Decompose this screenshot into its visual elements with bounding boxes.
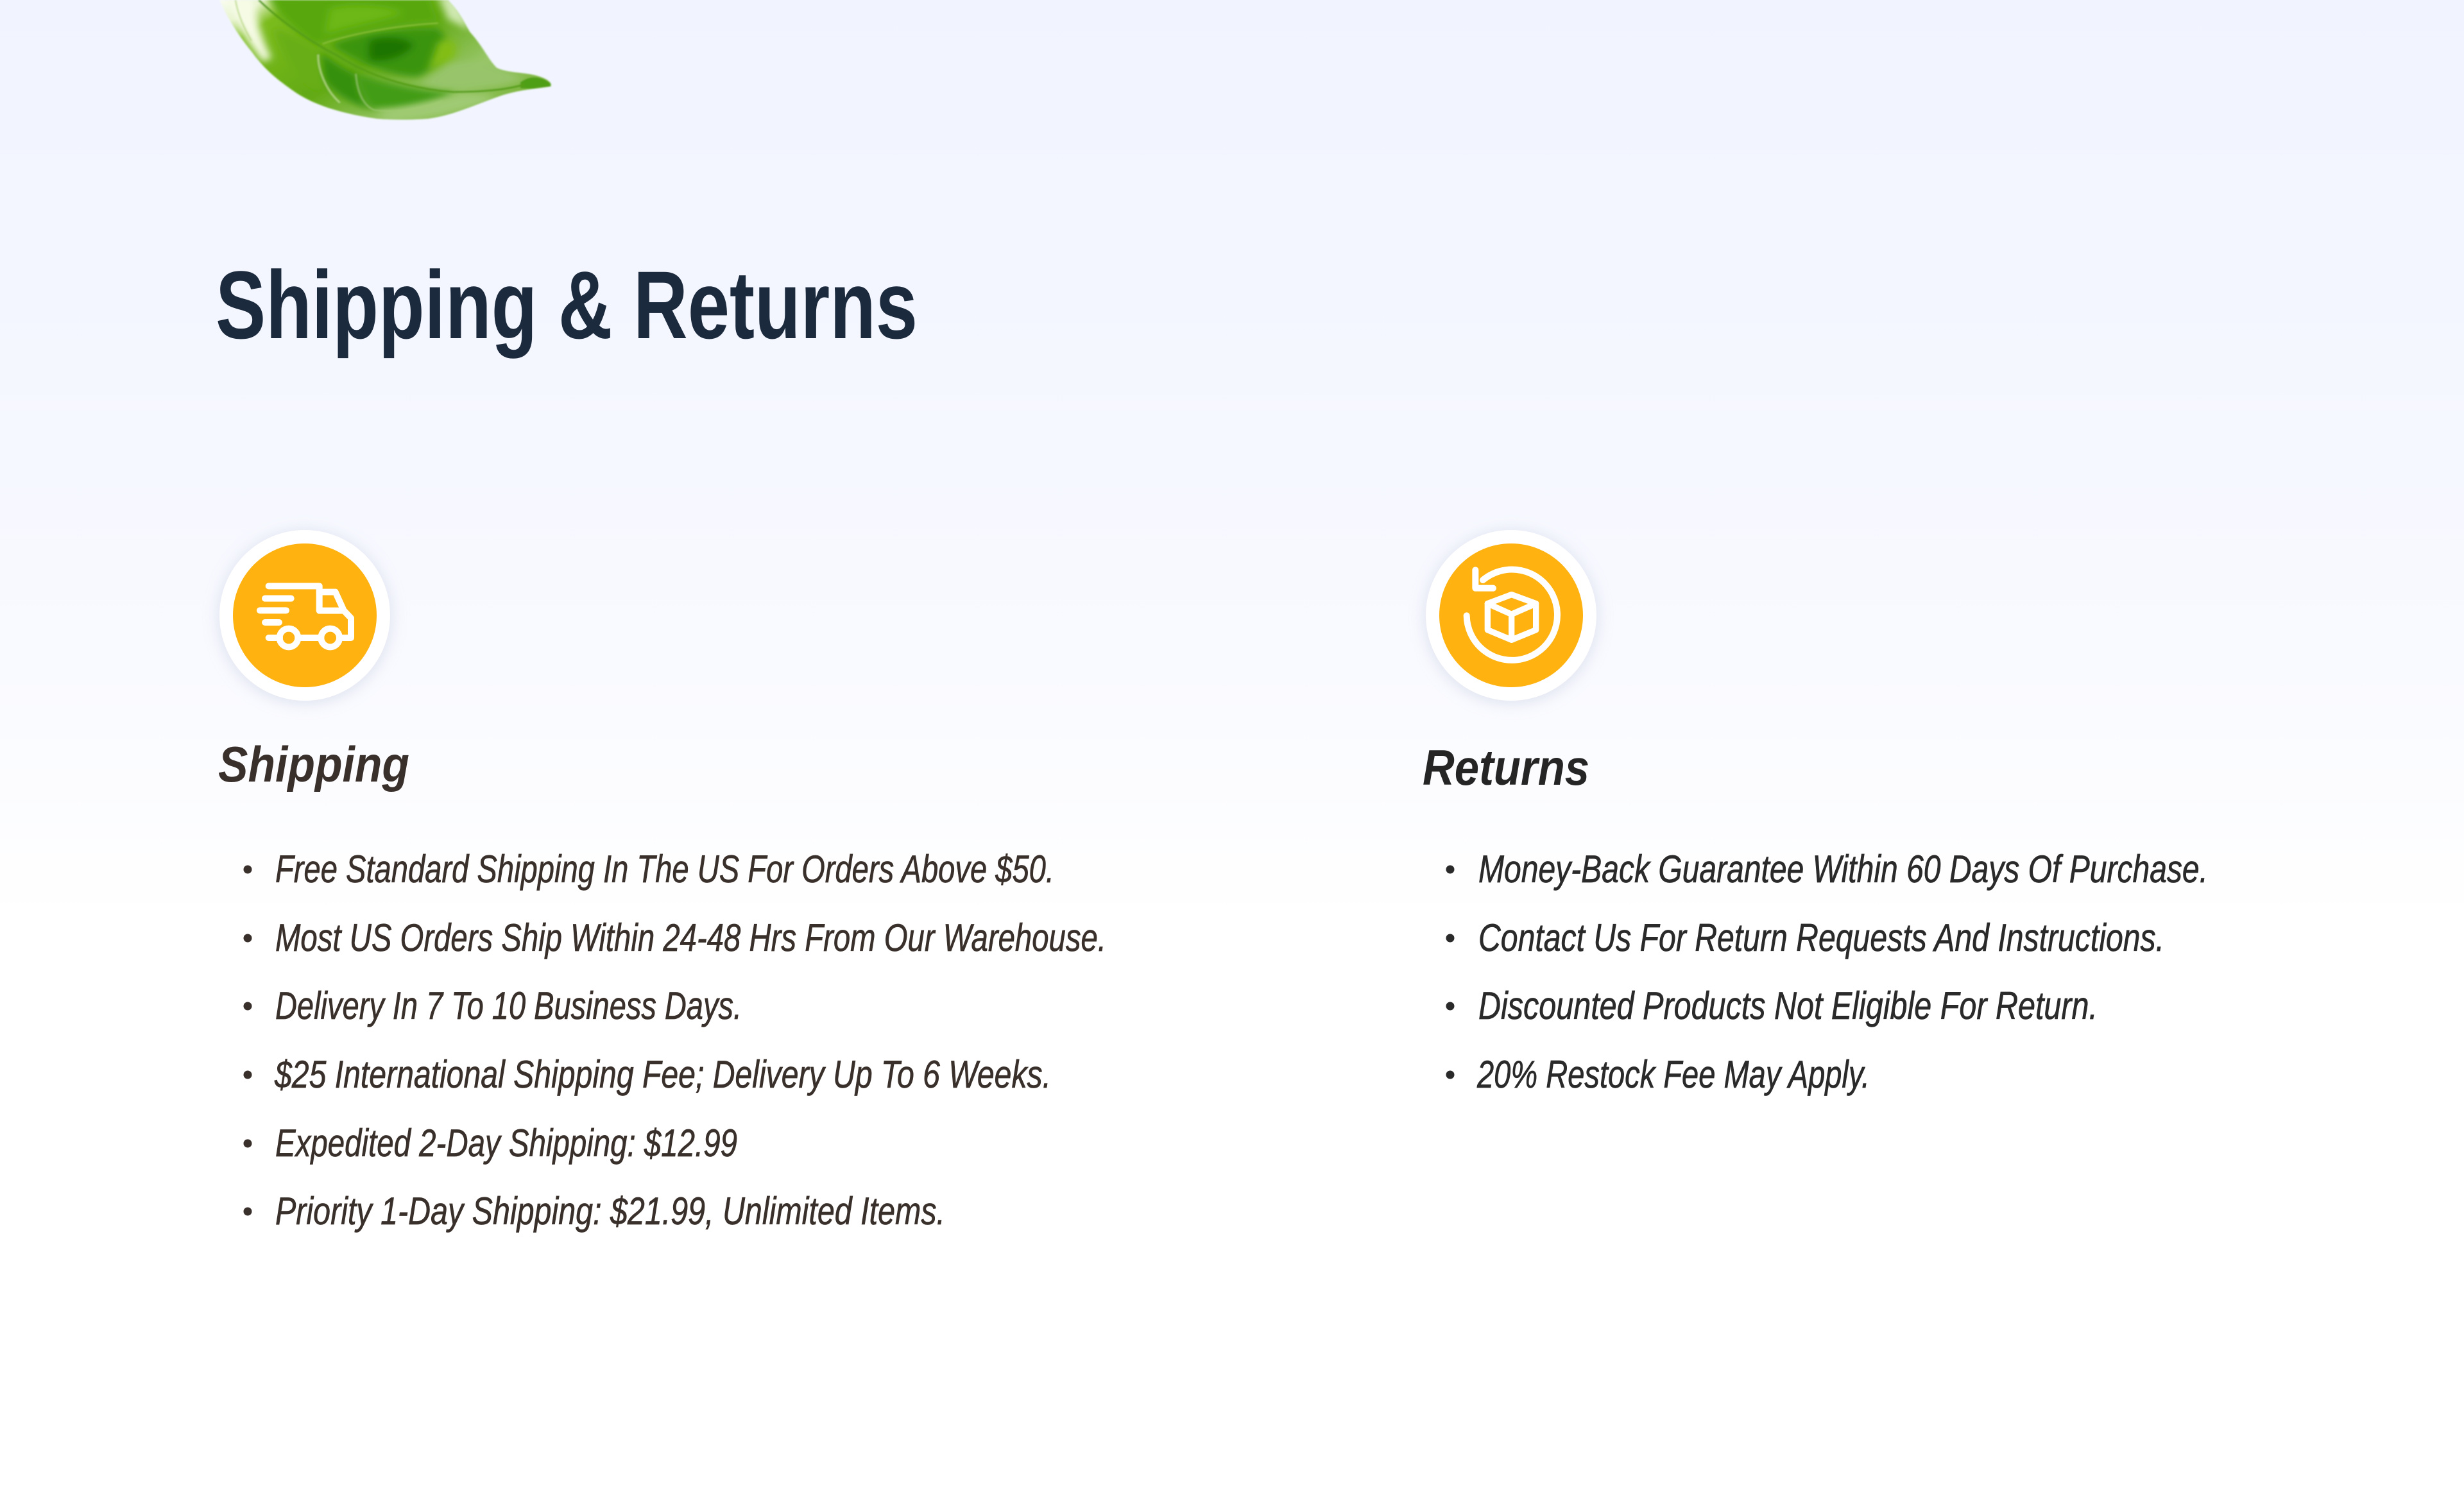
title: Shipping & Returns	[216, 251, 918, 359]
list: returns details: Discounted Products Not Eligible For Return.	[1478, 984, 2098, 1027]
icon: delivery truck	[219, 530, 391, 703]
icon: return box	[1425, 530, 1597, 703]
heading: returns: Returns	[1423, 739, 1589, 796]
list: shipping details: Delivery In 7 To 10 Business Days.	[275, 984, 742, 1027]
list: returns details: Money-Back Guarantee Within 60 Days Of Purchase.	[1478, 848, 2208, 891]
heading: shipping: Shipping	[218, 736, 409, 792]
list: returns details	[1446, 848, 2208, 1096]
list: shipping details: Priority 1-Day Shipping: $21.99, Unlimited Items.	[275, 1190, 945, 1233]
list: shipping details: $25 International Shipping Fee; Delivery Up To 6 Weeks.	[274, 1053, 1051, 1096]
list: shipping details: Free Standard Shipping In The US For Orders Above $50.	[275, 848, 1054, 891]
list: returns details: Contact Us For Return Requests And Instructions.	[1478, 916, 2164, 959]
panel: shipping	[218, 530, 1106, 1233]
list: returns details: 20% Restock Fee May Apply.	[1476, 1053, 1870, 1096]
list: shipping details	[244, 848, 1106, 1233]
list: shipping details: Most US Orders Ship Within 24-48 Hrs From Our Warehouse.	[275, 916, 1106, 959]
leaf illustration	[212, 0, 556, 126]
list: shipping details: Expedited 2-Day Shipping: $12.99	[275, 1122, 737, 1165]
panel: returns	[1423, 530, 2208, 1096]
